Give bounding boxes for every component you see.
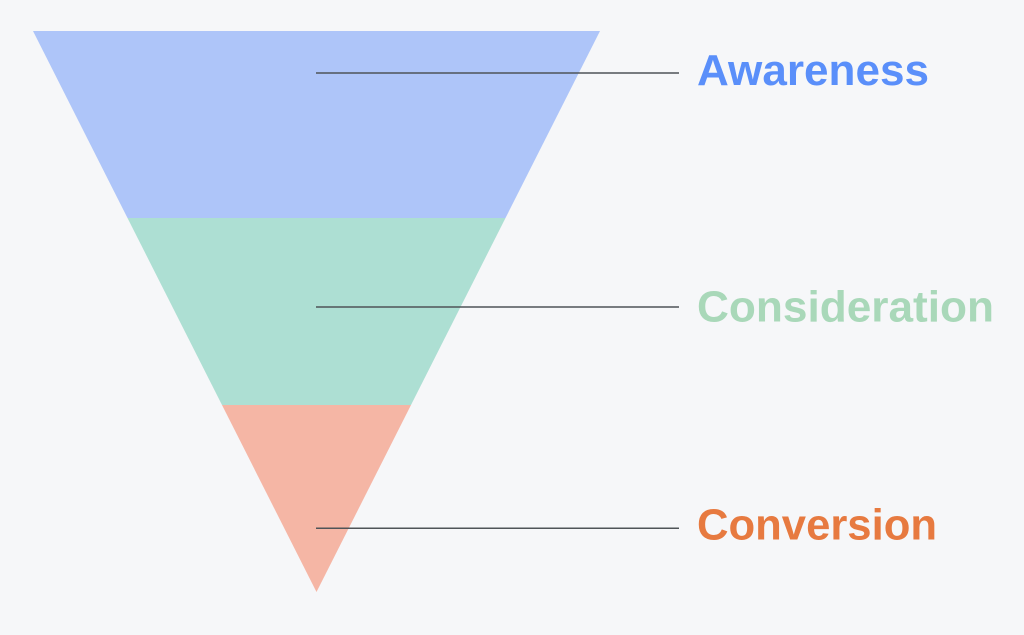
- leader line: conversion: [316, 527, 679, 529]
- funnel segment: awareness: [33, 31, 600, 218]
- label: consideration: Consideration: [697, 283, 994, 331]
- leader line: awareness: [316, 72, 679, 74]
- label: awareness: Awareness: [697, 47, 929, 95]
- funnel segment: conversion: [222, 405, 411, 592]
- funnel segment: consideration: [128, 218, 506, 405]
- leader line: consideration: [316, 306, 679, 308]
- label: conversion: Conversion: [697, 502, 937, 550]
